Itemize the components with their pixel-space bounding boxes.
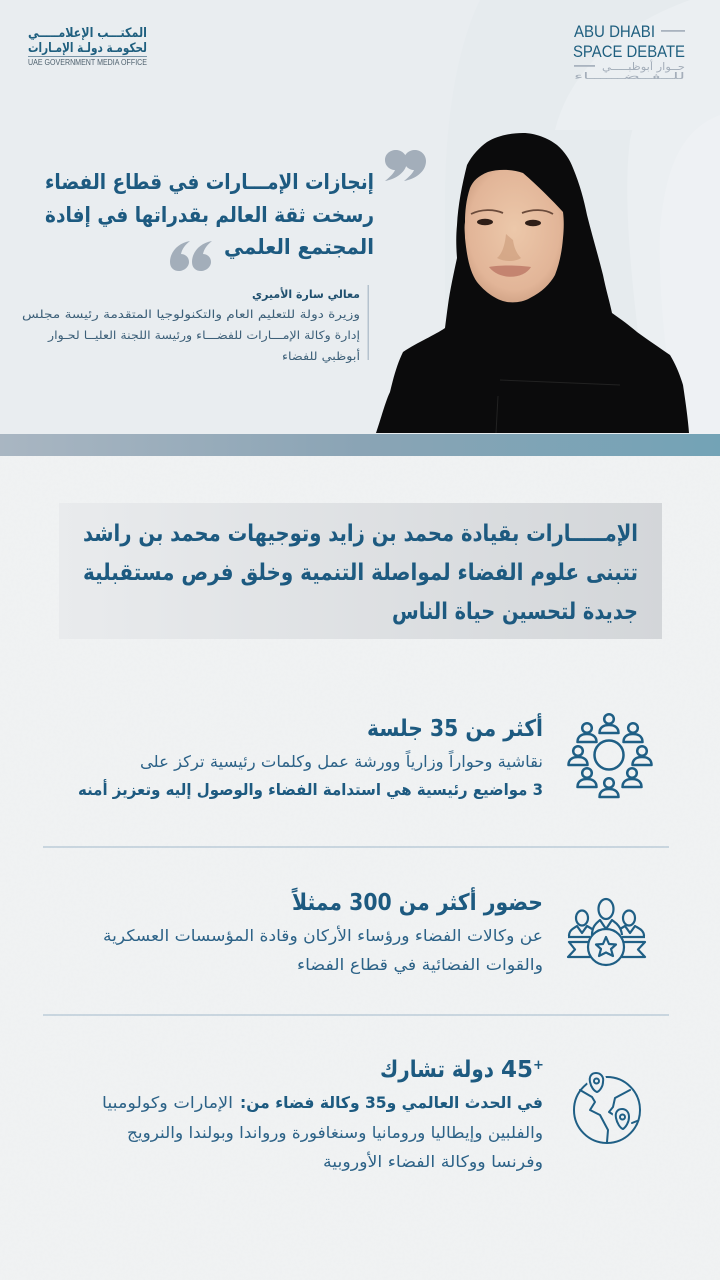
text: attendance: عن وكالات الفضاء ورؤساء الأركان وقادة المؤسسات العسكرية (103, 925, 543, 946)
text: attendance: حضور أكثر من 300 ممثلاً (291, 886, 543, 916)
face (465, 170, 564, 302)
eyebrows (471, 210, 553, 214)
logo: Abu Dhabi Space Debate: للــفــضــــــاء (574, 72, 685, 82)
text: participating countries: دولة تشارك (380, 1057, 494, 1083)
text: sessions: نقاشية وحواراً وزارياً وورشة عمل وكلمات رئيسية تركز على (140, 749, 543, 772)
panel: participating countries (102, 1057, 640, 1172)
text: participating countries: في الحدث العالمي و35 وكالة فضاء من: (240, 1093, 543, 1113)
text: participating countries: وفرنسا ووكالة الفضاء الأوروبية (323, 1151, 543, 1172)
panel: hero background (0, 0, 720, 434)
text: attendance: والقوات الفضائية في قطاع الفضاء (297, 955, 543, 975)
icon: globe with location pins (574, 1073, 640, 1143)
text: participating countries (102, 1057, 544, 1172)
text: sessions: أكثر من 35 جلسة (367, 712, 543, 742)
panel: main statement (59, 503, 662, 639)
speaker name and role: إدارة وكالة الإمـــارات للفضـــاء ورئيسة اللجنة العليــا لحـوار (47, 328, 360, 343)
logo: Abu Dhabi Space Debate: حــوار أبوظبـــــي (602, 59, 685, 73)
heading: quote (45, 170, 374, 259)
heading: quote: المجتمع العلمي (224, 235, 374, 259)
speaker name and role: أبوظبي للفضاء (282, 348, 360, 364)
text: attendance (103, 886, 543, 975)
panel: sessions (78, 712, 652, 800)
logo: Abu Dhabi Space Debate (573, 22, 685, 82)
panel: lower background (0, 456, 720, 1280)
logo: UAE Government Media Office: المكتـــب الإعلامـــــي (28, 26, 147, 41)
panel: attendance (103, 886, 645, 975)
band (0, 434, 720, 456)
logo: Abu Dhabi Space Debate: SPACE DEBATE (573, 42, 685, 61)
icon: closing quotation mark (385, 150, 426, 181)
photo: portrait of speaker (376, 133, 689, 433)
logo: UAE Government Media Office (28, 26, 147, 67)
garment fold (496, 380, 620, 433)
icon: opening quotation mark (170, 241, 212, 271)
heading: quote: رسخت ثقة العالم بقدراتها في إفادة (45, 203, 374, 227)
speaker name and role: معالي سارة الأميري (252, 287, 360, 301)
icon: people around a table (568, 714, 652, 797)
speaker name and role (22, 285, 369, 364)
text: participating countries: والفلبين وإيطاليا ورومانيا وسنغافورة ورواندا وبولندا والنرويج (127, 1123, 543, 1143)
text: participating countries: + (533, 1058, 544, 1073)
text: participating countries: 45 (501, 1057, 533, 1083)
logo: UAE Government Media Office: لحكومـة دولـة الإمـارات (28, 41, 147, 56)
panel: main statement: تتبنى علوم الفضاء لمواصلة التنمية وخلق فرص مستقبلية (83, 560, 638, 586)
logo: UAE Government Media Office: UAE GOVERNMENT MEDIA OFFICE (28, 58, 147, 67)
abaya and hijab (376, 133, 689, 433)
panel: main statement: الإمـــــارات بقيادة محمد بن زايد وتوجيهات محمد بن راشد (83, 521, 638, 547)
speaker name and role: وزيرة دولة للتعليم العام والتكنولوجيا المتقدمة رئيسة مجلس (22, 307, 360, 322)
text: sessions (78, 712, 543, 800)
panel: main statement: جديدة لتحسين حياة الناس (392, 599, 638, 625)
text: participating countries: الإمارات وكولومبيا (102, 1093, 233, 1113)
logo: Abu Dhabi Space Debate: ABU DHABI (574, 22, 655, 41)
nose shadow (497, 234, 521, 261)
icon: delegates with star badge (568, 899, 645, 965)
lips (489, 266, 531, 277)
eyes (477, 219, 541, 226)
heading: quote: إنجازات الإمـــارات في قطاع الفضاء (45, 170, 374, 194)
text: sessions: 3 مواضيع رئيسية هي استدامة الفضاء والوصول إليه وتعزيز أمنه (78, 779, 543, 800)
